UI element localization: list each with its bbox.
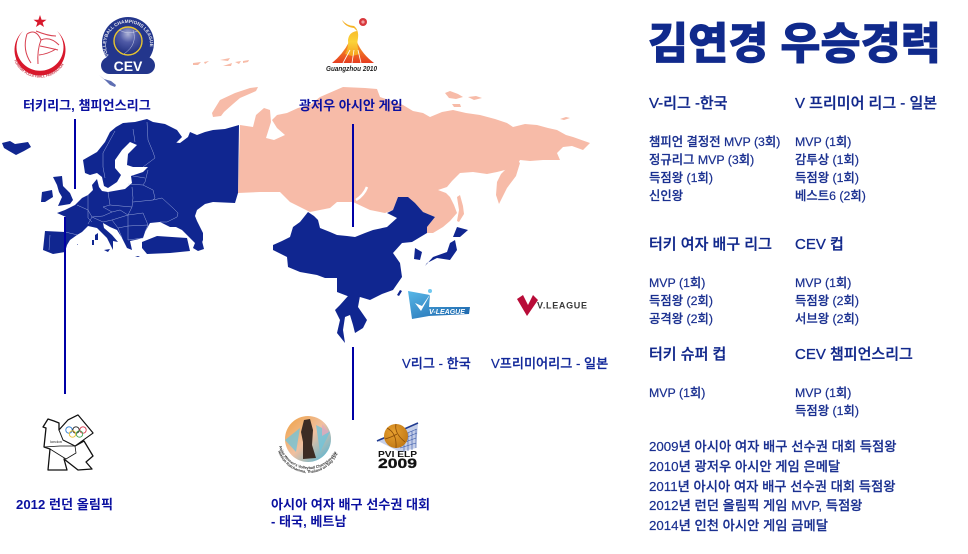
title: 김연경 우승경력 [648, 21, 941, 69]
panel: V-League Korea: 신인왕 [649, 189, 683, 203]
lake Baikal [356, 187, 367, 200]
logo: Guangzhou Asian Games [326, 18, 377, 73]
caption: Asian women's volleyball championship [271, 497, 430, 529]
logo: Korean V-League [408, 289, 470, 319]
logo: PVI ELP 2009: 2009 [378, 456, 417, 471]
panel: V-League Korea: 챔피언 결정전 MVP (3회) [649, 135, 780, 149]
panel: V Premier League Japan: 감투상 (1회) [795, 153, 859, 167]
map: Japan [397, 227, 468, 296]
caption: Asian women's volleyball championship: 아시아 여자 배구 선수권 대회 [271, 497, 430, 512]
logo: Asian women's volleyball championship [278, 416, 338, 474]
logo: Japan V.League [517, 295, 587, 316]
panel: international achievements: 2011년 아시아 여자 배구 선수권 대회 득점왕 [649, 479, 896, 494]
map: Europe [2, 119, 239, 257]
panel: V Premier League Japan: 베스트6 (2회) [795, 189, 866, 203]
panel: CEV Cup: 득점왕 (2회) [795, 294, 859, 308]
panel: Turkish women's volleyball league [649, 236, 772, 326]
map: Korea [414, 248, 422, 260]
logo: Japan V.League: V.LEAGUE [537, 300, 587, 310]
logo: CEV Champions League: CEV [114, 58, 143, 74]
panel: Turkish Super Cup [649, 346, 726, 400]
panel: CEV Champions League: CEV 챔피언스리그 [795, 346, 913, 363]
logo: London 2012: london [50, 439, 62, 444]
country borders [49, 122, 178, 250]
panel: V-League Korea: 득점왕 (1회) [649, 171, 713, 185]
panel: international achievements: 2012년 런던 올림픽 게임 MVP, 득점왕 [649, 498, 862, 513]
panel: V-League Korea: 정규리그 MVP (3회) [649, 153, 754, 167]
logo: Guangzhou Asian Games: Guangzhou 2010 [326, 66, 377, 73]
panel: V-League Korea: V-리그 -한국 [649, 95, 728, 112]
label: Turkish league, Champions League: 터키리그, 챔피언스리그 [23, 98, 151, 113]
logo: Turkish volleyball federation: TURKISH VOLLEYBALL FEDERATION [14, 59, 64, 78]
panel: Turkish women's volleyball league: 득점왕 (2회) [649, 294, 713, 308]
logo: CEV Champions League [101, 17, 155, 74]
label: Guangzhou Asian Games: 광저우 아시안 게임 [299, 98, 403, 113]
logo: PVI ELP 2009 [377, 423, 418, 471]
panel: V-League Korea [649, 95, 780, 203]
caption: London Olympics: 2012 런던 올림픽 [16, 497, 113, 512]
panel: V Premier League Japan: 득점왕 (1회) [795, 171, 859, 185]
map: Russia highlighted region [193, 58, 590, 233]
panel: Turkish women's volleyball league: 터키 여자 배구 리그 [649, 236, 772, 253]
panel: CEV Cup [795, 236, 859, 326]
small islands near CEV logo [99, 75, 116, 87]
panel: Turkish women's volleyball league: MVP (1회) [649, 276, 705, 290]
logo: Turkish volleyball federation [14, 15, 66, 78]
panel: Turkish Super Cup: 터키 슈퍼 컵 [649, 346, 726, 363]
panel: CEV Cup: 서브왕 (2회) [795, 312, 859, 326]
panel: international achievements: 2014년 인천 아시안 게임 금메달 [649, 518, 828, 533]
logo: PVI ELP 2009: PVI ELP [378, 449, 417, 459]
map: Southeast Asia [335, 296, 367, 343]
logo: Asian women's volleyball championship: Asian Women's Volleyball Championship [279, 446, 336, 470]
panel: international achievements: 2009년 아시아 여자 배구 선수권 대회 득점왕 [649, 439, 896, 454]
panel: CEV Cup: CEV 컵 [795, 236, 844, 253]
caption: V Premier League Japan: V프리미어리그 - 일본 [491, 356, 608, 371]
panel: V Premier League Japan: MVP (1회) [795, 135, 851, 149]
logo: London 2012 [43, 415, 93, 470]
panel: CEV Cup: MVP (1회) [795, 276, 851, 290]
panel: international achievements [649, 439, 896, 533]
panel: V Premier League Japan [795, 95, 937, 203]
panel: CEV Champions League: 득점왕 (1회) [795, 404, 859, 418]
panel: CEV Champions League [795, 346, 913, 418]
connector lines [64, 119, 354, 420]
panel: CEV Champions League: MVP (1회) [795, 386, 851, 400]
logo: Korean V-League: V-LEAGUE [429, 309, 465, 316]
map: China [273, 197, 435, 300]
caption: V-League Korea: V리그 - 한국 [402, 356, 471, 371]
logo: Asian women's volleyball championship: Nakhon Ratchasima, Thailand on Sep 13-21, 2013 [278, 450, 338, 474]
caption: Asian women's volleyball championship: - 태국, 베트남 [271, 514, 347, 529]
logo: CEV Champions League: VOLLEYBALL CHAMPIONS LEAGUE [102, 20, 154, 58]
panel: V Premier League Japan: V 프리미어 리그 - 일본 [795, 95, 937, 112]
panel: Turkish Super Cup: MVP (1회) [649, 386, 705, 400]
panel: international achievements: 2010년 광저우 아시안 게임 은메달 [649, 459, 840, 474]
panel: Turkish women's volleyball league: 공격왕 (2회) [649, 312, 713, 326]
